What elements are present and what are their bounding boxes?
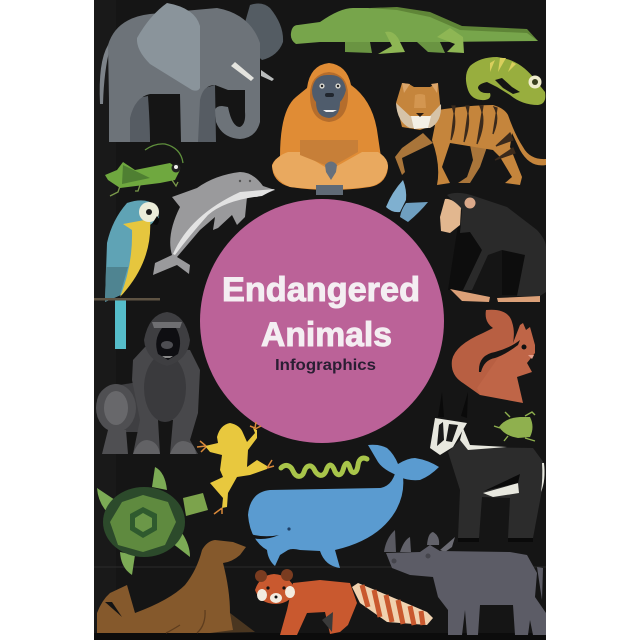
icon: snake xyxy=(281,458,367,476)
book cover background xyxy=(94,0,546,640)
icon: red panda xyxy=(255,569,433,635)
icon: antelope xyxy=(430,392,545,542)
title: Endangered: Endangered xyxy=(222,271,420,309)
icon: rhino xyxy=(384,530,546,635)
icon: frog xyxy=(197,422,274,514)
icon: chameleon xyxy=(466,57,545,105)
subtitle: Infographics: Infographics xyxy=(275,357,376,374)
icon: sea lion xyxy=(97,540,255,633)
icon: squirrel xyxy=(452,310,535,403)
title: Animals: Animals xyxy=(261,316,392,354)
icon: crocodile xyxy=(291,7,538,54)
icon: chimpanzee xyxy=(440,193,546,302)
icon: dolphin xyxy=(153,172,275,275)
icon: butterfly xyxy=(386,180,428,222)
icon: turtle xyxy=(97,467,208,575)
title circle xyxy=(200,199,444,443)
icon: parrot xyxy=(94,200,160,349)
icon: tiger xyxy=(395,83,546,185)
icon: gorilla xyxy=(96,312,200,454)
icon: whale xyxy=(248,445,439,568)
icon: beetle xyxy=(494,412,535,441)
icon: elephant xyxy=(100,3,283,142)
icon: orangutan xyxy=(272,63,388,195)
icon: grasshopper xyxy=(105,144,183,196)
